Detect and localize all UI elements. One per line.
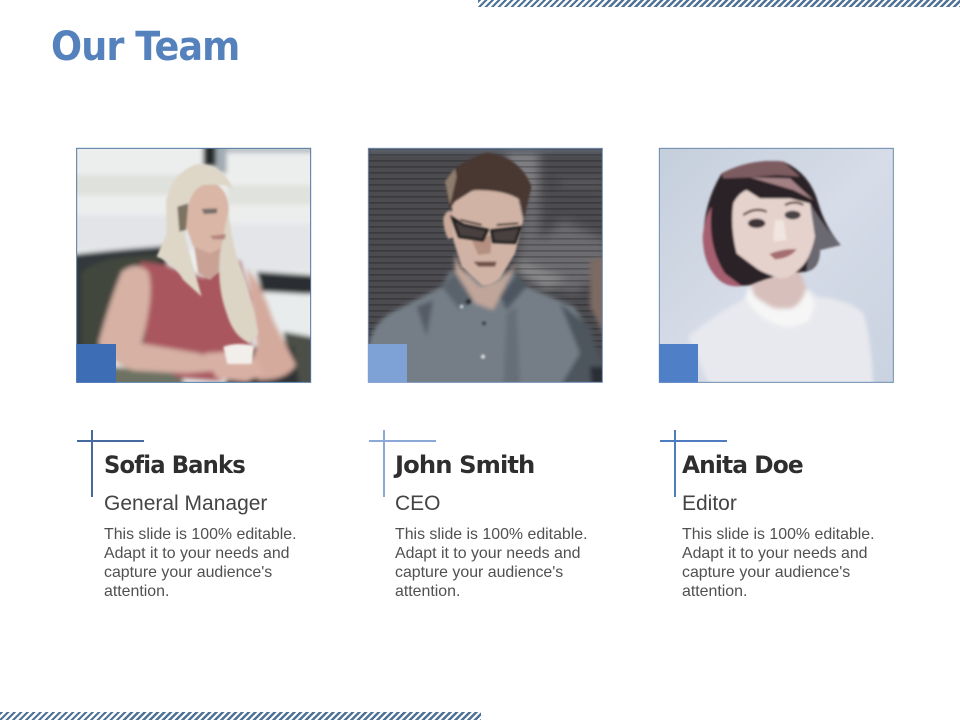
- card: Sofia Banks: [77, 430, 297, 600]
- description: Adapt it to your needs and: [395, 545, 581, 562]
- description: capture your audience's: [682, 564, 850, 581]
- description: Adapt it to your needs and: [682, 545, 868, 562]
- description: This slide is 100% editable.: [682, 526, 875, 543]
- photo: Sofia Banks: [76, 148, 312, 383]
- name: John Smith: [395, 451, 534, 479]
- accent vertical line: [91, 430, 93, 497]
- top stripe band: [478, 0, 960, 7]
- accent vertical line: [674, 430, 676, 497]
- name: Anita Doe: [682, 451, 803, 479]
- photo: Anita Doe: [658, 148, 894, 383]
- role: Editor: [682, 492, 737, 515]
- card: John Smith: [369, 430, 588, 600]
- name: Sofia Banks: [104, 451, 245, 479]
- photo: John Smith: [368, 148, 603, 383]
- accent horizontal line: [660, 440, 727, 442]
- description: attention.: [682, 583, 747, 600]
- description: [682, 526, 875, 600]
- description: attention.: [395, 583, 460, 600]
- description: [104, 526, 297, 600]
- description: capture your audience's: [395, 564, 563, 581]
- accent horizontal line: [77, 440, 144, 442]
- description: capture your audience's: [104, 564, 272, 581]
- role: General Manager: [104, 492, 267, 515]
- description: This slide is 100% editable.: [104, 526, 297, 543]
- description: attention.: [104, 583, 169, 600]
- role: CEO: [395, 492, 441, 515]
- card: Anita Doe: [660, 430, 875, 600]
- accent horizontal line: [369, 440, 436, 442]
- accent vertical line: [383, 430, 385, 497]
- title: Our Team: [51, 24, 239, 70]
- description: This slide is 100% editable.: [395, 526, 588, 543]
- bottom stripe band: [0, 712, 481, 720]
- description: [395, 526, 588, 600]
- description: Adapt it to your needs and: [104, 545, 290, 562]
